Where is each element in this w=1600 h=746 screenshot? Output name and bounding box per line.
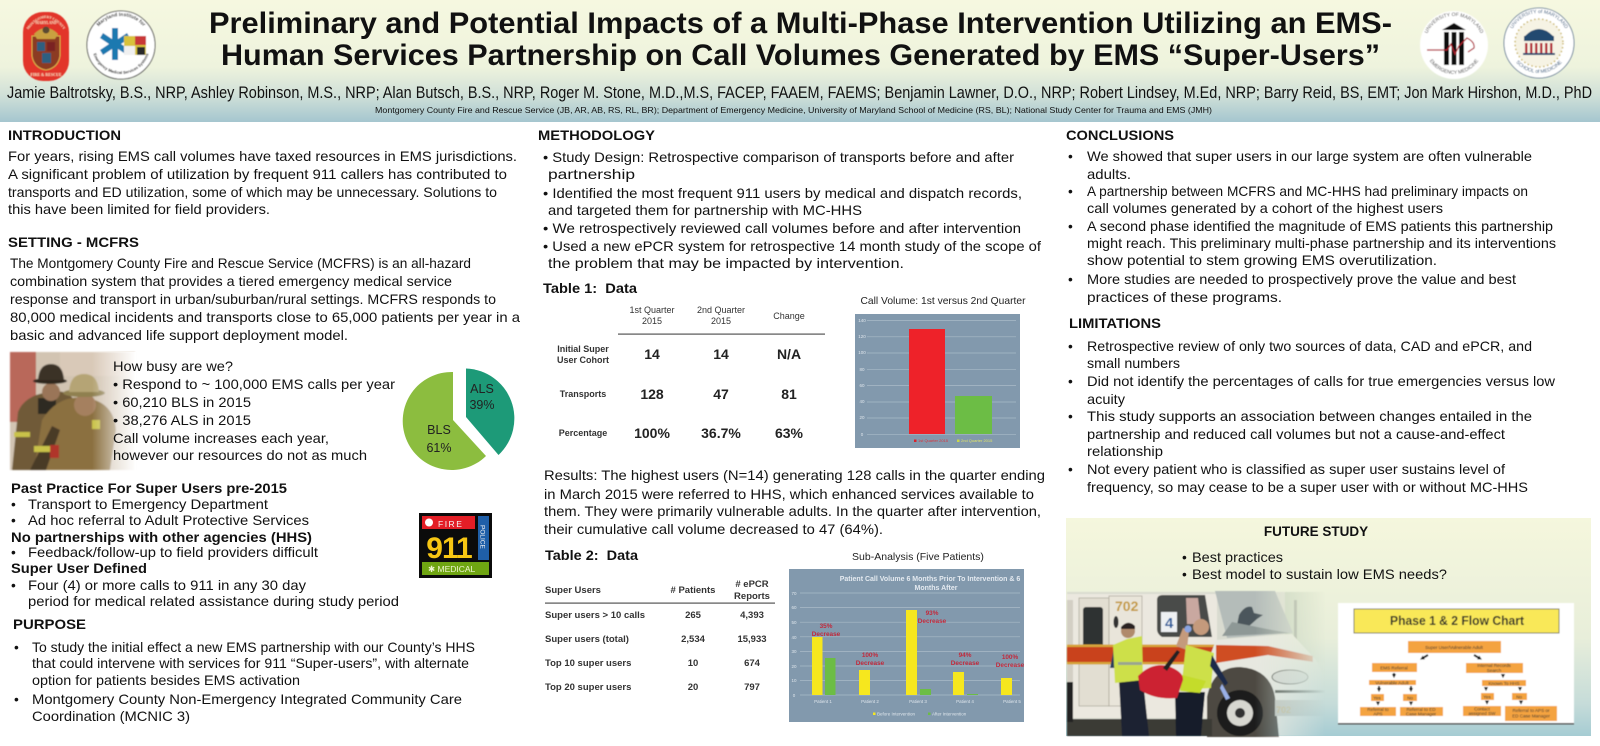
table 1: data: Change xyxy=(773,311,805,321)
panel: setting MCFRS xyxy=(8,234,520,343)
bar chart: patient call volume: 100% xyxy=(1002,654,1018,661)
panel: past practice: Four (4) or more calls to 911 in any 30 day xyxy=(28,578,306,593)
icon: 911 badge: ✱ MEDICAL xyxy=(428,564,476,574)
table 1: data: 63% xyxy=(775,425,804,441)
table 2: data: 4,393 xyxy=(740,610,764,621)
panel: limitations: This study supports an association between changes entailed in the xyxy=(1087,409,1532,424)
table 2: data: 10 xyxy=(688,658,698,669)
bar chart: patient call volume: 0 xyxy=(793,693,796,698)
panel: past practice xyxy=(11,480,399,609)
table 2: data: 15,933 xyxy=(737,634,767,645)
panel: setting MCFRS: combination system that provides a tiered emergency medical service xyxy=(10,274,452,289)
panel: purpose: Montgomery County Non-Emergency Integrated Community Care xyxy=(32,692,462,707)
bar chart: patient call volume: 35% xyxy=(820,623,833,630)
flow chart boxes xyxy=(1360,641,1557,721)
results text: them. They were primarily vulnerable adults. In the quarter after intervention, xyxy=(544,504,1041,519)
bar chart: call volume 1st vs 2nd quarter: 120 xyxy=(858,334,866,339)
title: Human Services Partnership on Call Volumes Generated by EMS “Super-Users” xyxy=(221,39,1380,72)
text: how busy are we xyxy=(113,359,395,463)
panel: conclusions: A second phase identified the magnitude of EMS patients this partnership xyxy=(1087,219,1553,234)
flow chart boxes: No xyxy=(1516,694,1522,700)
panel: purpose: To study the initial effect a new EMS partnership with our County’s HHS xyxy=(32,640,475,655)
table 1: data: 14 xyxy=(644,346,660,362)
logo: Maryland Institute for EMS Systems: Maryland Institute for xyxy=(96,12,146,27)
logo: University of Maryland School of Medicine: SCHOOL of MEDICINE xyxy=(1516,60,1562,74)
header banner xyxy=(0,0,1600,122)
pie chart: ALS vs BLS: BLS xyxy=(427,423,451,437)
panel: past practice: • xyxy=(11,513,16,528)
table 1: data: User Cohort xyxy=(557,355,609,365)
table 2: data: 797 xyxy=(744,682,760,693)
panel: past practice: Transport to Emergency Department xyxy=(28,497,268,512)
bar chart: call volume 1st vs 2nd quarter xyxy=(855,314,1020,448)
table 2: data: Super users > 10 calls xyxy=(545,610,645,621)
table 2: data: 265 xyxy=(685,610,702,621)
table 1: data: 100% xyxy=(634,425,670,441)
panel: conclusions: adults. xyxy=(1087,167,1131,182)
table 1: data: 14 xyxy=(713,346,729,362)
results text: their cumulative call volume decreased to 47 (64%). xyxy=(544,522,883,537)
icon: 911 badge xyxy=(419,513,492,578)
panel: purpose: option for patients besides EMS activation xyxy=(32,673,300,688)
panel: limitations: LIMITATIONS xyxy=(1069,315,1161,331)
bar chart: patient call volume: 100% xyxy=(862,652,878,659)
pie chart: ALS vs BLS: ALS xyxy=(470,382,494,396)
panel: conclusions: CONCLUSIONS xyxy=(1066,127,1174,143)
panel: past practice: Super User Defined xyxy=(11,560,147,576)
table 2: data: 20 xyxy=(688,682,698,693)
panel: limitations: Did not identify the percentages of calls for true emergencies versus low xyxy=(1087,374,1555,389)
logo: Montgomery County Fire & Rescue: MARYLAND xyxy=(35,21,57,25)
flow chart boxes: APS xyxy=(1373,712,1383,716)
bar chart: patient call volume: Before Intervention xyxy=(877,712,916,716)
bar chart: call volume 1st vs 2nd quarter: 0 xyxy=(861,432,864,437)
logo: University of Maryland Emergency Medicine: EMERGENCY MEDICINE xyxy=(1429,58,1479,74)
text: how busy are we: • 60,210 BLS in 2015 xyxy=(113,395,251,410)
future study bullets xyxy=(1182,550,1447,582)
table 1: data: 128 xyxy=(640,386,664,402)
table 1: data: 2015 xyxy=(642,316,662,326)
bar chart: call volume 1st vs 2nd quarter: 60 xyxy=(859,383,865,388)
panel: methodology: and targeted them for partnership with MC-HHS xyxy=(548,203,862,218)
panel: limitations: frequency, so may cease to be a super user with or without MC-HHS xyxy=(1087,480,1528,495)
table 1: data: 1st Quarter xyxy=(629,305,675,315)
heading: future study: FUTURE STUDY xyxy=(1264,524,1368,539)
logo: University of Maryland Emergency Medicine: UNIVERSITY OF MARYLAND xyxy=(1424,12,1484,34)
flow chart boxes: Known To HHS xyxy=(1488,681,1520,686)
photo: firefighters xyxy=(10,352,136,472)
flow chart arrows xyxy=(1378,655,1521,704)
table 1: data: 81 xyxy=(781,386,797,402)
flow chart boxes: Internal Records xyxy=(1477,663,1512,668)
logo: Maryland Institute for EMS Systems xyxy=(86,10,156,80)
bar chart: patient call volume: Months After xyxy=(915,585,958,592)
flow chart boxes: Contact xyxy=(1474,706,1491,712)
panel: limitations: Not every patient who is classified as super user sustains level of xyxy=(1087,462,1505,477)
flow chart boxes: Case Manager xyxy=(1406,712,1437,716)
future study bullets: Best practices xyxy=(1192,550,1283,565)
panel: introduction: this have been limited for field providers. xyxy=(8,202,270,217)
bar chart: patient call volume: 94% xyxy=(959,652,972,659)
bar chart: patient call volume: Decrease xyxy=(996,662,1025,669)
logo: University of Maryland Emergency Medicine xyxy=(1420,10,1488,80)
panel: purpose: • xyxy=(14,692,19,707)
bar chart: patient call volume: 70 xyxy=(791,591,797,596)
panel: conclusions: show potential to stem growing EMS overutilization. xyxy=(1087,253,1437,268)
table 2: data xyxy=(545,547,775,693)
panel: limitations: Retrospective review of only two sources of data, CAD and ePCR, and xyxy=(1087,339,1532,354)
bar chart: patient call volume: 50 xyxy=(791,620,797,625)
bar chart: patient call volume: Decrease xyxy=(856,660,885,667)
flow chart title bar: Phase 1 & 2 Flow Chart xyxy=(1390,614,1525,628)
panel: limitations: partnership and reduced call volumes but not a cause-and-effect xyxy=(1087,427,1505,442)
logo: University of Maryland School of Medicine xyxy=(1502,6,1576,80)
bar chart: patient call volume: Patient 5 xyxy=(1003,699,1021,704)
bar chart: patient call volume: 20 xyxy=(791,664,797,669)
panel: setting MCFRS: The Montgomery County Fire and Rescue Service (MCFRS) is an all-hazard xyxy=(10,256,471,271)
panel: conclusions xyxy=(1066,127,1556,305)
photo: ambulance and crew: 702 xyxy=(1276,705,1291,715)
panel: conclusions: • xyxy=(1068,219,1073,234)
flow chart boxes: EMS Referral xyxy=(1380,666,1408,670)
panel: methodology: • We retrospectively reviewed call volumes before and after intervention xyxy=(543,221,1021,236)
panel: introduction: transports and ED utilization, some of which may be unnecessary. Solutions to xyxy=(8,185,497,200)
bar chart: patient call volume: After Intervention xyxy=(932,712,967,716)
table 1: data xyxy=(543,280,825,441)
table 1: data: N/A xyxy=(777,346,801,362)
panel: setting MCFRS: response and transport in urban/suburban/rural settings. MCFRS responds to xyxy=(10,292,496,307)
panel: conclusions: More studies are needed to prospectively prove the value and best xyxy=(1087,272,1516,287)
panel: introduction: For years, rising EMS call volumes have taxed resources in EMS jurisdictions. xyxy=(8,149,517,164)
panel: purpose: that could intervene with services for 911 “Super-users”, with alternate xyxy=(32,656,469,671)
table 1: data: Table 1: Data xyxy=(543,280,637,296)
table 1: data: 36.7% xyxy=(701,425,741,441)
icon: 911 badge: FIRE xyxy=(438,519,463,529)
table 2: data: Super users (total) xyxy=(545,634,629,645)
logo: University of Maryland School of Medicine: UNIVERSITY of MARYLAND xyxy=(1510,9,1568,29)
bar chart: patient call volume: Patient Call Volume 6 Months Prior To Intervention & 6 xyxy=(840,576,1020,583)
table 1: data: Percentage xyxy=(559,428,607,438)
bar chart: patient call volume: Patient 2 xyxy=(861,699,879,704)
table 2: data: 674 xyxy=(744,658,761,669)
logo: Montgomery County Fire & Rescue xyxy=(22,11,70,82)
flow chart boxes: Yes xyxy=(1483,694,1491,700)
logo: Montgomery County Fire & Rescue: MONTGOMERY COUNTY xyxy=(26,14,66,30)
panel: methodology: partnership xyxy=(548,167,635,182)
panel: introduction: A significant problem of utilization by frequent 911 callers has contributed to xyxy=(8,167,507,182)
panel: future study xyxy=(1066,518,1591,737)
bar chart: call volume 1st vs 2nd quarter: 20 xyxy=(859,415,865,420)
panel: methodology: • Used a new ePCR system for retrospective 14 month study of the scope of xyxy=(543,239,1041,254)
panel: past practice: No partnerships with other agencies (HHS) xyxy=(11,529,312,545)
panel: conclusions: A partnership between MCFRS and MC-HHS had preliminary impacts on xyxy=(1087,184,1528,199)
text: how busy are we: Call volume increases each year, xyxy=(113,431,329,446)
bar chart: call volume 1st vs 2nd quarter: 100 xyxy=(858,350,866,355)
table 1: data: 2015 xyxy=(711,316,731,326)
bar chart: patient call volume xyxy=(789,569,1025,722)
bar chart: call volume 1st vs 2nd quarter: 2nd Quarter 2015 xyxy=(961,438,993,443)
table 2: data: Top 10 super users xyxy=(545,658,631,669)
bar chart: patient call volume: 93% xyxy=(926,610,939,617)
panel: limitations: • xyxy=(1068,374,1073,389)
bar chart: patient call volume: Patient 1 xyxy=(814,699,832,704)
logo: Montgomery County Fire & Rescue: FIRE & RESCUE xyxy=(30,72,62,77)
flow chart title bar xyxy=(1354,609,1559,633)
bar chart: patient call volume: 30 xyxy=(791,649,797,654)
bar chart: patient call volume: Decrease xyxy=(918,618,947,625)
panel: purpose xyxy=(13,616,475,724)
panel: past practice: Past Practice For Super Users pre-2015 xyxy=(11,480,287,496)
table 1: data: 2nd Quarter xyxy=(697,305,745,315)
panel: past practice: Feedback/follow-up to field providers difficult xyxy=(28,545,318,560)
table 1: data: 47 xyxy=(713,386,729,402)
bar chart: patient call volume: 40 xyxy=(791,635,797,640)
flow chart boxes: Search xyxy=(1487,668,1502,673)
icon: 911 badge: 911 xyxy=(426,532,472,565)
panel: past practice: • xyxy=(11,578,16,593)
panel: methodology: the problem that may be impacted by intervention. xyxy=(548,256,904,271)
bar chart: call volume 1st vs 2nd quarter: 1st Quarter 2015 xyxy=(918,438,949,443)
panel: setting MCFRS: SETTING - MCFRS xyxy=(8,234,139,250)
logo: Maryland Institute for EMS Systems: Emergency Medical Services Systems xyxy=(93,52,149,74)
results text: in March 2015 were referred to HHS, which enhanced services available to xyxy=(544,487,1034,502)
bar chart: patient call volume: Decrease xyxy=(812,631,841,638)
panel: past practice: Ad hoc referral to Adult Protective Services xyxy=(28,513,309,528)
flow chart boxes: Referral to xyxy=(1367,707,1389,712)
flow chart boxes: Yes xyxy=(1373,696,1381,700)
panel: limitations: • xyxy=(1068,462,1073,477)
panel: past practice: • xyxy=(11,545,16,560)
panel: past practice: • xyxy=(11,497,16,512)
bar chart: patient call volume: Patient 4 xyxy=(956,699,974,704)
text: how busy are we: however our resources do not as much xyxy=(113,448,367,463)
panel: methodology: METHODOLOGY xyxy=(538,127,656,143)
table 2: data: Top 20 super users xyxy=(545,682,631,693)
table 2: data: Table 2: Data xyxy=(545,547,638,563)
chart title: sub-analysis: Sub-Analysis (Five Patients) xyxy=(852,551,984,563)
text: how busy are we: • Respond to ~ 100,000 EMS calls per year xyxy=(113,377,395,392)
results text: Results: The highest users (N=14) generating 128 calls in the quarter ending xyxy=(544,468,1045,483)
panel: methodology: • Identified the most frequent 911 users by medical and dispatch records, xyxy=(543,186,1022,201)
panel: conclusions: We showed that super users in our large system are often vulnerable xyxy=(1087,149,1532,164)
panel: purpose: • xyxy=(14,640,19,655)
panel: limitations: small numbers xyxy=(1087,356,1180,371)
chart title: call volume: Call Volume: 1st versus 2nd Quarter xyxy=(860,295,1026,307)
panel: conclusions: • xyxy=(1068,184,1073,199)
panel: conclusions: might reach. This preliminary multi-phase partnership and its interventions xyxy=(1087,236,1556,251)
bar chart: patient call volume: Patient 3 xyxy=(909,699,927,704)
pie chart: ALS vs BLS: 39% xyxy=(469,398,495,412)
text: how busy are we: • 38,276 ALS in 2015 xyxy=(113,413,251,428)
panel: setting MCFRS: basic and advanced life support deployment model. xyxy=(10,328,348,343)
table 2: data: # ePCR xyxy=(735,579,769,590)
bar chart: patient call volume: Decrease xyxy=(951,660,980,667)
panel: setting MCFRS: 80,000 medical incidents and transports close to 65,000 patients per year in a xyxy=(10,310,520,325)
panel: conclusions: • xyxy=(1068,272,1073,287)
text: how busy are we: How busy are we? xyxy=(113,359,233,374)
flow chart boxes: Vulnerable Adult xyxy=(1375,680,1409,686)
panel: limitations: relationship xyxy=(1087,444,1163,459)
panel: purpose: PURPOSE xyxy=(13,616,86,632)
title xyxy=(209,7,1392,72)
pie chart: ALS vs BLS: 61% xyxy=(426,441,452,455)
flow chart xyxy=(1338,603,1574,724)
icon: 911 badge: POLICE xyxy=(478,525,486,550)
table 2: data: Reports xyxy=(734,591,770,602)
table 1: data: Initial Super xyxy=(557,344,609,354)
future study bullets: • xyxy=(1182,550,1187,565)
flow chart boxes: assigned SW xyxy=(1468,711,1496,716)
panel: introduction: INTRODUCTION xyxy=(8,127,121,143)
flow chart boxes: ED Case Manager xyxy=(1512,714,1550,718)
results text xyxy=(544,468,1045,537)
bar chart: call volume 1st vs 2nd quarter: 140 xyxy=(858,318,866,323)
panel: conclusions: • xyxy=(1068,149,1073,164)
bar chart: patient call volume: 60 xyxy=(791,605,797,610)
table 2: data: 2,534 xyxy=(681,634,706,645)
affiliations: Montgomery County Fire and Rescue Service (JB, AR, AB, RS, RL, BR); Department of Emergency Medicine, University of Maryland School of Medicine (RS, BL); National Study Center for Trauma and EMS (JMH) xyxy=(375,105,1212,115)
pie chart: ALS vs BLS xyxy=(403,368,514,470)
table 2: data: Super Users xyxy=(545,585,601,596)
panel: conclusions: call volumes generated by a cohort of the highest users xyxy=(1087,201,1443,216)
panel: introduction xyxy=(8,127,517,217)
bar chart: call volume 1st vs 2nd quarter: 80 xyxy=(859,367,865,372)
panel: methodology xyxy=(538,127,1041,271)
flow chart boxes: Referral to ED xyxy=(1406,707,1436,712)
panel: limitations: • xyxy=(1068,409,1073,424)
panel: purpose: Coordination (MCNIC 3) xyxy=(32,709,190,724)
panel: methodology: • Study Design: Retrospective comparison of transports before and after xyxy=(543,150,1014,165)
flow chart boxes: Super User/Vulnerable Adult xyxy=(1425,645,1484,650)
table 1: data: Transports xyxy=(560,389,606,399)
panel: past practice: period for medical related assistance during study period xyxy=(28,594,399,609)
title: Preliminary and Potential Impacts of a Multi-Phase Intervention Utilizing an EMS- xyxy=(209,7,1392,40)
future study bullets: • xyxy=(1182,567,1187,582)
photo: ambulance and crew: 4 xyxy=(1165,615,1174,632)
photo: ambulance and crew xyxy=(1067,591,1325,737)
panel: limitations: acuity xyxy=(1087,392,1125,407)
future study bullets: Best model to sustain low EMS needs? xyxy=(1192,567,1447,582)
panel: conclusions: practices of these programs. xyxy=(1087,290,1282,305)
flow chart boxes: No xyxy=(1407,696,1413,700)
photo: ambulance and crew: 702 xyxy=(1115,598,1139,614)
panel: limitations: • xyxy=(1068,339,1073,354)
bar chart: call volume 1st vs 2nd quarter: 40 xyxy=(859,399,865,404)
flow chart boxes: Referral to APS or xyxy=(1512,708,1550,713)
bar chart: patient call volume: 10 xyxy=(791,678,797,683)
table 2: data: # Patients xyxy=(671,585,715,596)
panel: limitations xyxy=(1068,315,1555,495)
